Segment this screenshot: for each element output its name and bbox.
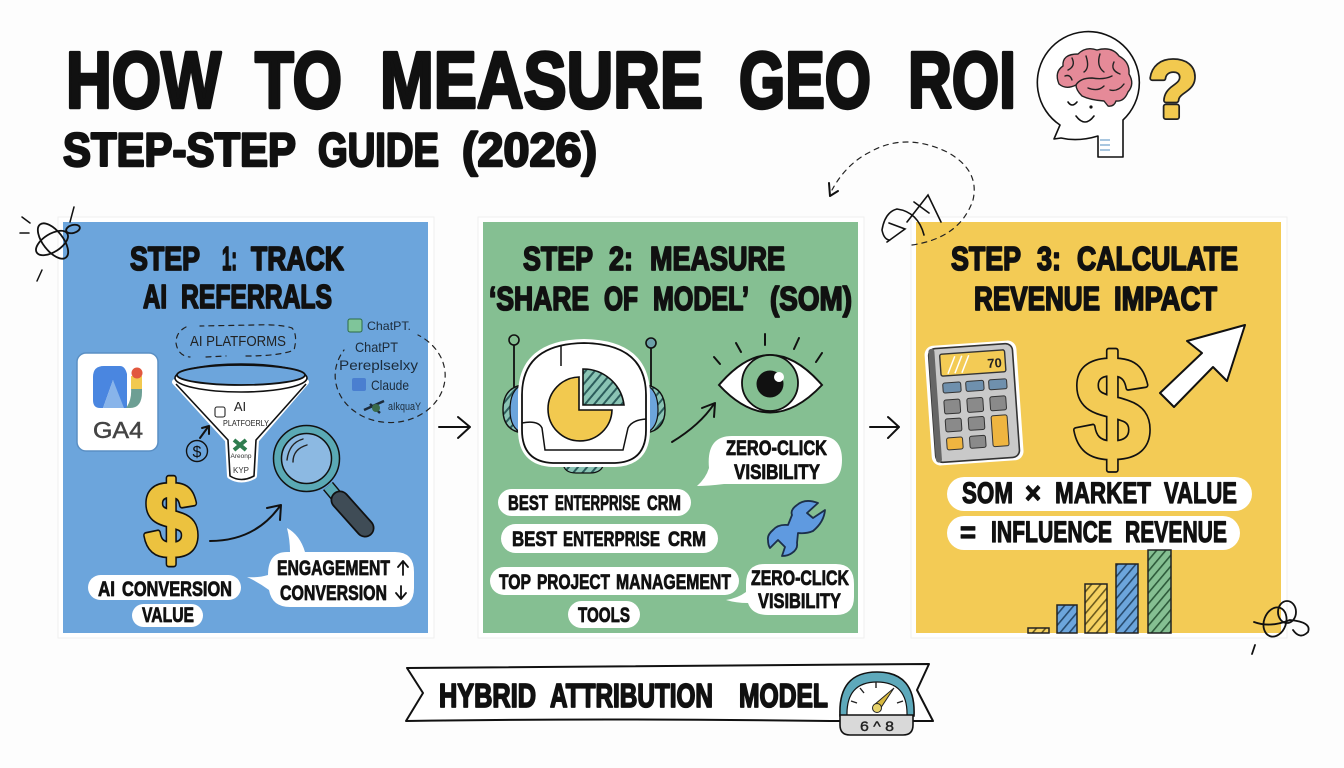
heading: step 2 xyxy=(489,240,852,317)
callout: zero-click visibility 1: VISIBILITY xyxy=(734,461,820,484)
list: AI platform names: Pereplselxy xyxy=(339,357,418,373)
heading: step 2: ‘SHARE xyxy=(489,280,589,317)
label: AI platforms dashed bubble: AI PLATFORMS xyxy=(190,333,286,350)
doodle: bottom-right scribble xyxy=(1252,601,1309,654)
heading: step 2: (SOM) xyxy=(770,280,852,317)
panel: step 2 xyxy=(478,217,864,638)
arrow: step 1 to step 2 xyxy=(439,417,470,438)
icon: GA4 card xyxy=(77,353,158,451)
pill: best enterprise CRM xyxy=(498,489,691,516)
banner: hybrid attribution model: HYBRID xyxy=(439,677,536,714)
heading: step 2: MODEL’ xyxy=(653,280,749,317)
icon: calculator xyxy=(924,340,1024,466)
pill: top project management tools: MANAGEMENT xyxy=(616,571,731,594)
icon: funnel: KYP xyxy=(233,466,249,475)
title: HOW xyxy=(66,36,221,124)
icon: funnel: Areonp xyxy=(231,453,252,460)
subtitle: (2026) xyxy=(462,123,597,176)
list: AI platform names: ChatPT xyxy=(355,339,398,355)
title: GEO xyxy=(739,36,871,124)
subtitle: STEP-STEP xyxy=(63,123,296,176)
icon: GA4 card: GA4 xyxy=(93,417,143,443)
pill: best enterprise CRM: ENTERPRISE xyxy=(555,492,640,515)
arrow: robot to eye xyxy=(672,403,715,442)
list: AI platform names: ChatPT. xyxy=(367,319,411,333)
list: AI platform names xyxy=(335,319,445,423)
banner: hybrid attribution model: ATTRIBUTION xyxy=(550,677,713,714)
pill: best enterprise CRM second: ENTERPRISE xyxy=(563,528,660,551)
callout: zero-click visibility 2: VISIBILITY xyxy=(758,590,841,613)
label: AI platforms dashed bubble xyxy=(176,325,296,357)
callout: zero-click visibility 2 xyxy=(726,564,854,615)
pill: AI conversion value xyxy=(88,575,241,627)
pill: formula line 1 xyxy=(947,477,1252,511)
heading: step 2: OF xyxy=(604,280,638,317)
pill: top project management tools: TOP xyxy=(499,571,531,594)
icon: calculator: 70 xyxy=(987,355,1002,371)
icon: magnifying glass xyxy=(278,430,365,528)
list: AI platform names: Claude xyxy=(371,377,409,393)
pill: best enterprise CRM: CRM xyxy=(647,492,681,515)
icon: gold dollar: $ xyxy=(145,462,197,579)
heading: step 1: 1: xyxy=(222,240,237,277)
heading: step 3 xyxy=(951,240,1238,317)
icon: question mark: ? xyxy=(1149,45,1197,134)
heading: step 3: REVENUE xyxy=(974,280,1100,317)
heading: step 1: TRACK xyxy=(251,240,344,277)
banner: hybrid attribution model: MODEL xyxy=(739,677,828,714)
title xyxy=(66,36,1016,124)
heading: step 1: STEP xyxy=(130,240,200,277)
pill: formula line 1: × xyxy=(1025,477,1041,510)
panel: step 3 xyxy=(911,217,1287,638)
pill: top project management tools xyxy=(490,567,739,628)
icon: outlined dollar: $ xyxy=(1074,327,1150,490)
icon: funnel: PLATFOERLY xyxy=(223,418,269,428)
pill: best enterprise CRM second: BEST xyxy=(512,528,557,551)
banner: hybrid attribution model xyxy=(406,664,933,735)
callout: engagement and conversion: CONVERSION xyxy=(280,582,387,605)
doodle: paper plane scribble xyxy=(882,195,941,242)
icon: funnel: AI xyxy=(234,399,246,414)
pill: formula line 2 xyxy=(947,516,1240,550)
bar chart xyxy=(1028,550,1171,633)
icon: eye xyxy=(714,334,822,412)
title: MEASURE xyxy=(380,36,703,124)
pill: AI conversion value: CONVERSION xyxy=(122,578,232,601)
icon: gold dollar: $ xyxy=(145,462,197,579)
list: AI platform names: aIkquaY xyxy=(388,401,422,413)
pill: best enterprise CRM: BEST xyxy=(508,492,548,515)
title: TO xyxy=(255,36,342,124)
pill: formula line 1: MARKET xyxy=(1055,477,1151,510)
heading: step 3: 3: xyxy=(1037,240,1061,277)
heading: step 1: REFERRALS xyxy=(181,278,332,315)
icon: speedometer gauge xyxy=(840,672,914,735)
pill: top project management tools: PROJECT xyxy=(537,571,610,594)
icon: robot with pie chart xyxy=(503,335,665,473)
icon: small dollar coin: $ xyxy=(193,444,202,461)
callout: engagement and conversion: ENGAGEMENT xyxy=(277,557,390,580)
pill: AI conversion value: VALUE xyxy=(142,604,194,627)
icon: small dollar coin xyxy=(186,426,209,462)
heading: step 2: 2: xyxy=(609,240,633,277)
pill: formula line 1: SOM xyxy=(962,477,1013,510)
heading: step 3: CALCULATE xyxy=(1077,240,1238,277)
pill: formula line 2: INFLUENCE xyxy=(991,516,1112,549)
pill: best enterprise CRM second: CRM xyxy=(668,528,706,551)
heading: step 3: IMPACT xyxy=(1114,280,1217,317)
heading: step 2: STEP xyxy=(523,240,593,277)
heading: step 3: STEP xyxy=(951,240,1021,277)
pill: best enterprise CRM second xyxy=(501,524,718,553)
icon: head with brain xyxy=(1037,32,1139,157)
subtitle xyxy=(63,123,597,176)
heading: step 1: AI xyxy=(143,278,167,315)
callout: zero-click visibility 2: ZERO-CLICK xyxy=(751,567,849,590)
panel: step 1 xyxy=(58,217,445,638)
pill: top project management tools: TOOLS xyxy=(578,604,630,627)
heading: step 2: MEASURE xyxy=(650,240,785,277)
pill: formula line 2: = xyxy=(960,516,976,549)
subtitle: GUIDE xyxy=(318,123,439,176)
icon: question mark: ? xyxy=(1149,45,1197,134)
arrow: step 2 to step 3 xyxy=(870,417,899,438)
arrow: dashed loop xyxy=(829,142,974,245)
doodle: top-left scribble xyxy=(20,207,81,281)
heading: step 1 xyxy=(130,240,344,315)
pill: formula line 2: REVENUE xyxy=(1125,516,1227,549)
icon: speedometer gauge: 6 ^ 8 xyxy=(860,718,894,734)
icon: funnel xyxy=(175,364,307,480)
icon: outlined dollar: $ xyxy=(1074,327,1150,490)
callout: zero-click visibility 1 xyxy=(697,436,842,486)
pill: formula line 1: VALUE xyxy=(1164,477,1237,510)
callout: engagement and conversion xyxy=(247,528,414,607)
callout: zero-click visibility 1: ZERO-CLICK xyxy=(726,437,827,460)
arrow: white growth arrow xyxy=(1160,325,1245,407)
title: ROI xyxy=(908,36,1016,124)
pill: AI conversion value: AI xyxy=(98,578,115,601)
arrow: dollar to magnifier xyxy=(210,505,281,541)
icon: wrench xyxy=(768,501,825,556)
